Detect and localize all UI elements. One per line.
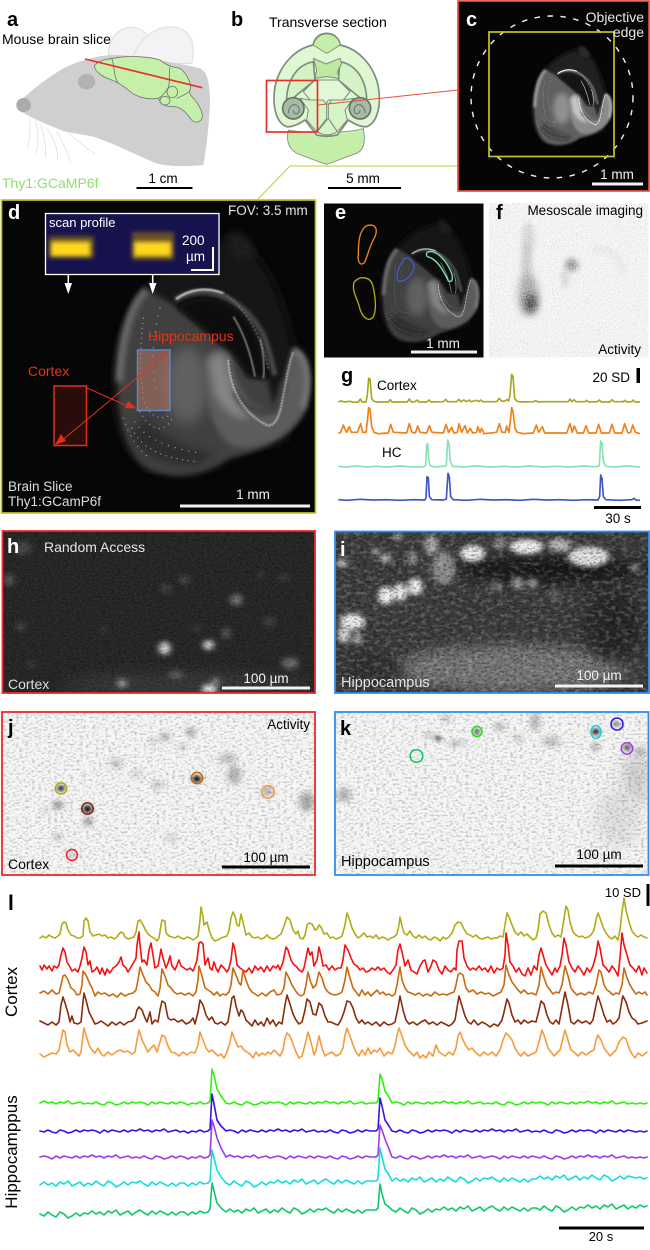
brain outline: [94, 57, 202, 122]
panel border: [335, 712, 648, 875]
label: HC: HC: [382, 445, 402, 460]
axis label: cortex: Cortex: [2, 966, 21, 1017]
traces: [338, 374, 640, 500]
panel h: cortex random access image: [2, 531, 315, 698]
panel d: full field of view slice: [2, 200, 316, 513]
cortex traces: [40, 898, 647, 1058]
slice image: [533, 46, 611, 145]
panel letter j: j: [7, 717, 14, 739]
scale bar 10 SD: [605, 884, 650, 906]
label: FOV: FOV: 3.5 mm: [228, 203, 308, 218]
label: objective edge: edge: [613, 24, 644, 40]
label: cortex: Cortex: [28, 363, 69, 379]
hippocampus region box: [138, 350, 170, 410]
scale bar 1 cm: 1 cm: [148, 171, 178, 186]
connector: yellow line to panel d: [258, 156, 489, 199]
scale bar 20 s: 20 s: [589, 1229, 614, 1244]
panel letter g: g: [341, 365, 353, 387]
image: [2, 531, 315, 698]
activity image: [335, 712, 650, 875]
scale bar 100 µm: [222, 850, 310, 868]
panel letter f: f: [496, 202, 503, 224]
ROI circles: [410, 718, 633, 762]
label: hippocampus: Hippocampus: [148, 328, 234, 344]
inset: scan profile: [46, 214, 219, 274]
yellow field box: [489, 32, 614, 156]
slice image: [115, 231, 308, 476]
label: objective edge: [586, 9, 644, 40]
label: transverse section: Transverse section: [269, 14, 387, 30]
scale bar 20 SD: [592, 368, 640, 385]
label: activity: Activity: [267, 717, 310, 732]
inset: scan profile: 200: [182, 233, 205, 248]
scale bar 100 µm: [555, 847, 643, 868]
panel letter i: i: [340, 539, 346, 561]
scale bar 5 mm: 5 mm: [346, 171, 380, 186]
scale bar 100 µm: 100 µm: [243, 671, 289, 686]
red arrows between regions: [55, 351, 169, 445]
panel b: transverse section: [231, 9, 401, 189]
scale bar 100 µm: 100 µm: [243, 850, 289, 865]
panel a: mouse brain slice: [2, 9, 210, 191]
scale bar 100 µm: 100 µm: [576, 668, 622, 683]
panel j: cortex activity: [2, 712, 315, 875]
label: mouse brain slice: Mouse brain slice: [2, 31, 111, 47]
scale bar 100 µm: [222, 671, 310, 690]
scale bar 1 mm: 1 mm: [236, 487, 270, 502]
inset: scan profile: µm: [186, 249, 205, 264]
panel letter e: e: [335, 202, 346, 224]
activity image: [489, 203, 648, 357]
panel e: slice with regions of interest: [324, 202, 484, 358]
activity image: [2, 712, 315, 875]
label: activity: Activity: [598, 342, 641, 357]
hippocampus traces: [40, 1069, 647, 1218]
scale bar 1 mm: [592, 167, 643, 186]
scale bar 1 mm: [180, 487, 310, 508]
label: cortex: Cortex: [8, 856, 49, 872]
panel k: hippocampus activity: [335, 712, 650, 875]
panel background: [324, 204, 484, 358]
label: brain slice: [8, 479, 101, 509]
label: hippocampus: Hippocampus: [341, 854, 430, 870]
scale bar 1 mm: 1 mm: [426, 336, 460, 351]
panel background: [2, 200, 316, 513]
label: brain slice: Brain Slice: [8, 479, 73, 494]
scale bar 1 mm: 1 mm: [600, 167, 634, 182]
connector: red line to panel c: [318, 90, 458, 105]
label: genotype: Thy1:GCaMP6f: [2, 175, 99, 191]
scale bar 1 cm: [136, 171, 192, 189]
scale bar 30 s: 30 s: [605, 511, 631, 526]
inset: scan profile: scan profile: [49, 215, 115, 230]
arrows from scan profile: [64, 275, 156, 294]
label: hippocampus: Hippocampus: [341, 675, 430, 691]
panel letter h: h: [7, 536, 19, 558]
cortex region box: [54, 386, 86, 446]
panel letter c: c: [466, 9, 477, 31]
scale bar 10 SD: 10 SD: [605, 885, 641, 900]
red selection box: [266, 80, 318, 132]
panel background: [458, 1, 649, 191]
panel border: [335, 532, 649, 693]
ROI circles: [55, 772, 274, 860]
scale bar 5 mm: [328, 171, 401, 189]
panel letter l: l: [8, 892, 14, 915]
scale bar 100 µm: [555, 668, 643, 688]
label: objective edge: Objective: [586, 9, 644, 25]
panel letter b: b: [231, 9, 243, 31]
scale bar 20 s: [559, 1226, 644, 1244]
panel letter d: d: [8, 202, 20, 224]
mouse head illustration: [16, 27, 210, 166]
label: cortex: Cortex: [377, 378, 417, 393]
panel letter a: a: [7, 9, 19, 31]
label: cortex: Cortex: [8, 676, 49, 692]
panel f: mesoscale activity map: [489, 202, 648, 357]
panel l: single-cell traces: [2, 884, 650, 1244]
panel c: objective field of view: [458, 1, 649, 191]
label: random access: Random Access: [44, 539, 145, 555]
label: mesoscale imaging: Mesoscale imaging: [527, 203, 643, 218]
transverse section illustration: [274, 33, 379, 164]
slice image and ROI outlines: [353, 220, 478, 342]
scale bar 30 s: [594, 506, 641, 526]
image: [335, 532, 649, 694]
panel g: mesoscale traces: [338, 365, 641, 526]
panel border: [2, 531, 315, 693]
panel border: [2, 712, 315, 875]
scale bar 100 µm: 100 µm: [576, 847, 622, 862]
scale bar 20 SD: 20 SD: [592, 370, 630, 385]
label: brain slice: Thy1:GCamP6f: [8, 494, 101, 509]
panel letter k: k: [340, 718, 352, 740]
objective edge dashed circle: [471, 16, 633, 178]
axis label: hippocampus: Hippocamppus: [2, 1095, 21, 1209]
panel i: hippocampus random access image: [335, 532, 649, 694]
scale bar 1 mm: [411, 336, 477, 354]
